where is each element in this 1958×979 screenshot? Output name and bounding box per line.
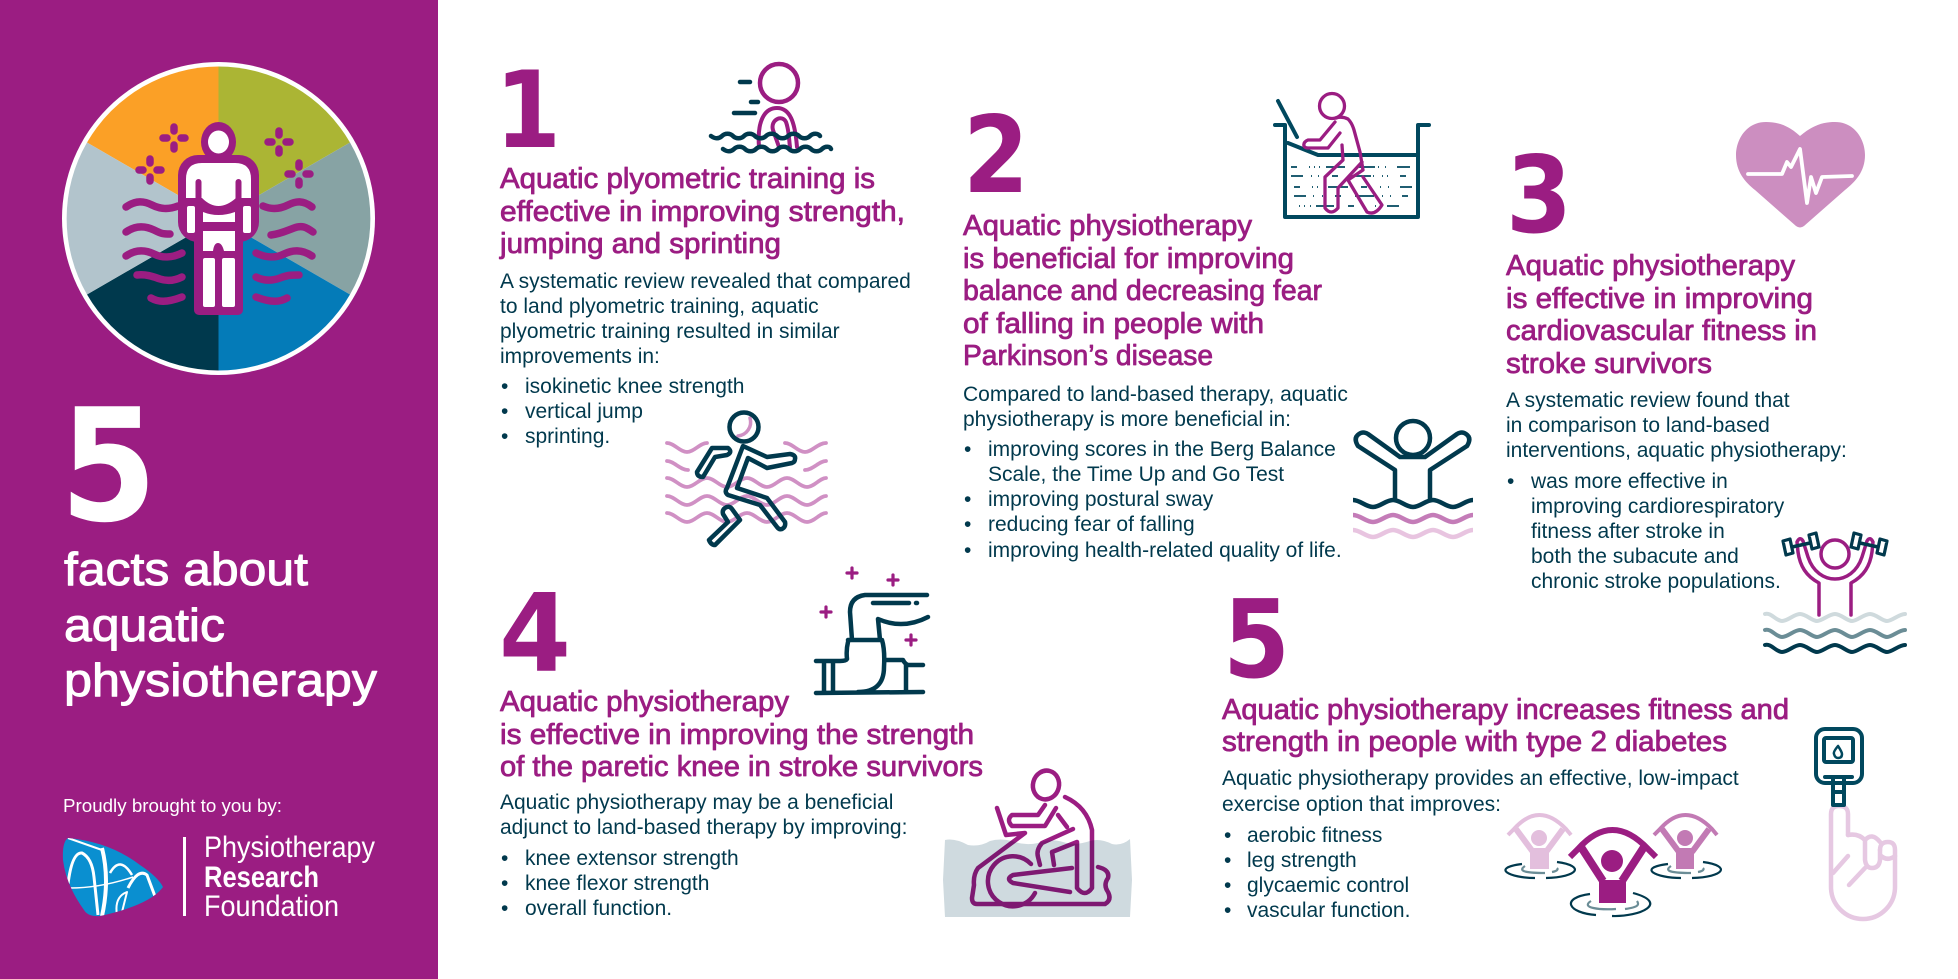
icon: person lifting dumbbells in water [1765, 533, 1905, 652]
bullet list: glycaemic control [1247, 874, 1409, 897]
icon: glucose meter and finger [1816, 729, 1895, 919]
bullet list: • [1224, 824, 1231, 847]
bullet list: vascular function. [1247, 899, 1410, 922]
body text: adjunct to land-based therapy by improving: [500, 816, 907, 839]
number 4: 4 [499, 572, 571, 697]
bullet list: knee extensor strength [525, 847, 739, 870]
bullet list: • [501, 400, 508, 423]
heading: Parkinson’s disease [963, 340, 1213, 372]
bullet list: • [964, 513, 971, 536]
bullet list: both the subacute and [1531, 545, 1739, 568]
heading: is effective in improving [1506, 283, 1813, 315]
heading: Aquatic physiotherapy increases fitness and [1222, 694, 1789, 726]
body text: Aquatic physiotherapy may be a beneficial [500, 791, 893, 814]
heading: stroke survivors [1506, 348, 1712, 380]
number 5: 5 [1223, 578, 1290, 703]
bullet list: fitness after stroke in [1531, 520, 1725, 543]
icon: knee exercise with sparkles [816, 568, 928, 693]
heading: Aquatic physiotherapy [500, 686, 790, 718]
panel: fact 3 [1506, 122, 1905, 652]
body text: plyometric training resulted in similar [500, 320, 840, 343]
bullet list: improving scores in the Berg Balance [988, 438, 1336, 461]
bullet list: vertical jump [525, 400, 643, 423]
panel: left sidebar [0, 0, 438, 979]
icon: APA blue mark [63, 838, 163, 916]
bullet list: • [964, 488, 971, 511]
number 3: 3 [1506, 134, 1572, 257]
bullet list: • [1224, 849, 1231, 872]
bullet list: • [1224, 874, 1231, 897]
body text: physiotherapy is more beneficial in: [963, 408, 1291, 431]
bullet list: • [1224, 899, 1231, 922]
body text: Compared to land-based therapy, aquatic [963, 383, 1348, 406]
title: facts about aquatic physiotherapy: facts about [64, 543, 308, 595]
logo wordmark: Foundation [204, 890, 339, 923]
icon: heart with ECG line [1736, 122, 1865, 228]
heading: balance and decreasing fear [963, 275, 1322, 307]
body text: in comparison to land-based [1506, 414, 1770, 437]
heading: effective in improving strength, [500, 196, 905, 228]
panel: fact 1 [495, 49, 911, 545]
icon: runner in water [667, 412, 826, 545]
bullet list: • [964, 539, 971, 562]
logo divider [183, 837, 186, 916]
bullet list: Scale, the Time Up and Go Test [988, 463, 1284, 486]
logo wordmark [204, 831, 375, 923]
body text: Aquatic physiotherapy provides an effective, low-impact [1222, 767, 1739, 790]
bullet list: • [964, 438, 971, 461]
body text: A systematic review revealed that compared [500, 270, 911, 293]
bullet list: overall function. [525, 897, 672, 920]
heading: Aquatic plyometric training is [500, 163, 875, 195]
logo wordmark: Research [204, 861, 319, 894]
icon: swimmer in water [711, 64, 831, 151]
logo wordmark: Physiotherapy [204, 831, 375, 864]
heading: of the paretic knee in stroke survivors [500, 751, 983, 783]
bullet list: • [501, 897, 508, 920]
icon: circular emblem with figure in water [62, 62, 375, 375]
bullet list: reducing fear of falling [988, 513, 1195, 536]
heading: Aquatic physiotherapy [1506, 250, 1796, 282]
heading: cardiovascular fitness in [1506, 315, 1817, 347]
bullet list: isokinetic knee strength [525, 375, 744, 398]
bullet list: • [501, 425, 508, 448]
bullet list: • [501, 872, 508, 895]
heading: jumping and sprinting [499, 228, 781, 260]
bullet list: improving cardiorespiratory [1531, 495, 1785, 518]
title: facts about aquatic physiotherapy: aquatic [64, 599, 225, 651]
bullet list: • [1507, 470, 1514, 493]
logo: APA Physiotherapy Research Foundation [62, 836, 375, 916]
heading: is effective in improving the strength [500, 719, 974, 751]
bullet list: leg strength [1247, 849, 1357, 872]
body text: improvements in: [500, 345, 660, 368]
credit line: Proudly brought to you by: [63, 795, 282, 816]
title: facts about aquatic physiotherapy: physiotherapy [64, 654, 377, 706]
number 2: 2 [963, 94, 1029, 217]
heading: of falling in people with [963, 308, 1264, 340]
heading: is beneficial for improving [963, 243, 1294, 275]
bullet list: sprinting. [525, 425, 610, 448]
bullet list: • [501, 375, 508, 398]
heading: strength in people with type 2 diabetes [1222, 726, 1727, 758]
big numeral 5: 5 [60, 375, 157, 557]
heading: Aquatic physiotherapy [963, 210, 1253, 242]
body text: A systematic review found that [1506, 389, 1790, 412]
body text: exercise option that improves: [1222, 793, 1501, 816]
number 1: 1 [495, 49, 561, 172]
panel: fact 4 [499, 568, 1132, 920]
body text: interventions, aquatic physiotherapy: [1506, 439, 1847, 462]
bullet list: aerobic fitness [1247, 824, 1382, 847]
bullet list: was more effective in [1530, 470, 1728, 493]
body text: to land plyometric training, aquatic [500, 295, 819, 318]
bullet list: improving postural sway [988, 488, 1214, 511]
panel: fact 5 [1222, 578, 1895, 922]
bullet list: • [501, 847, 508, 870]
icon: person walking in pool [1275, 94, 1429, 217]
icon: exercise bike in water [943, 768, 1132, 917]
icon: person with raised arms in water [1353, 421, 1473, 537]
bullet list: chronic stroke populations. [1531, 570, 1781, 593]
bullet list: improving health-related quality of life. [988, 539, 1342, 562]
icon: three people exercising in water [1505, 815, 1721, 916]
bullet list: knee flexor strength [525, 872, 709, 895]
panel: fact 2 [963, 94, 1473, 562]
